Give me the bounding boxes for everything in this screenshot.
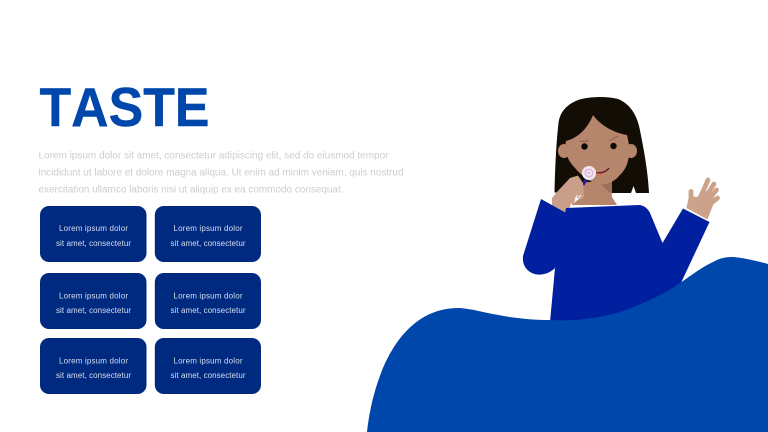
face: [565, 115, 629, 185]
card 2: Lorem ipsum dolor: [174, 224, 243, 233]
lollipop: [582, 166, 596, 180]
lollipop stick: [583, 178, 587, 185]
waving hand: [686, 180, 718, 220]
card 1: [40, 206, 146, 262]
card 5: sit amet, consectetur: [56, 371, 131, 380]
card 2: sit amet, consectetur: [170, 239, 246, 248]
ears: [558, 144, 637, 158]
body paragraph: exercitation ullamco laboris nisi ut aliquip ex ea commodo consequat.: [38, 184, 344, 196]
card 4: [155, 273, 261, 329]
card 6: [155, 338, 261, 394]
card 6: Lorem ipsum dolor: [174, 356, 243, 366]
card 5: Lorem ipsum dolor: [59, 356, 128, 366]
card 2: [155, 206, 261, 262]
holding hand: [552, 176, 584, 214]
card 4: Lorem ipsum dolor: [174, 292, 243, 300]
card 3: sit amet, consectetur: [56, 306, 131, 315]
eyebrows: [580, 136, 618, 142]
body paragraph: [38, 150, 404, 196]
hair: [554, 97, 649, 193]
body and raised arm: [550, 205, 710, 322]
mouth: [596, 168, 609, 173]
card 4: sit amet, consectetur: [170, 306, 246, 315]
illustration: girl with lollipop: [523, 97, 718, 322]
body paragraph: Lorem ipsum dolor sit amet, consectetur adipiscing elit, sed do eiusmod tempor: [38, 150, 389, 162]
card 3: [40, 273, 146, 329]
card 6: sit amet, consectetur: [170, 371, 246, 380]
title: TASTE: [40, 76, 210, 138]
eyes: [581, 143, 617, 150]
body paragraph: incididunt ut labore et dolore magna aliqua. Ut enim ad minim veniam, quis nostrud: [38, 168, 404, 178]
sleeve: [523, 199, 568, 275]
finger gaps: [575, 195, 581, 199]
card 1: sit amet, consectetur: [56, 239, 131, 248]
neck: [572, 182, 617, 205]
wave shape: [367, 257, 768, 432]
card 5: [40, 338, 146, 394]
card 1: Lorem ipsum dolor: [59, 224, 128, 233]
card 3: Lorem ipsum dolor: [59, 292, 128, 300]
neck shadow: [600, 180, 612, 194]
